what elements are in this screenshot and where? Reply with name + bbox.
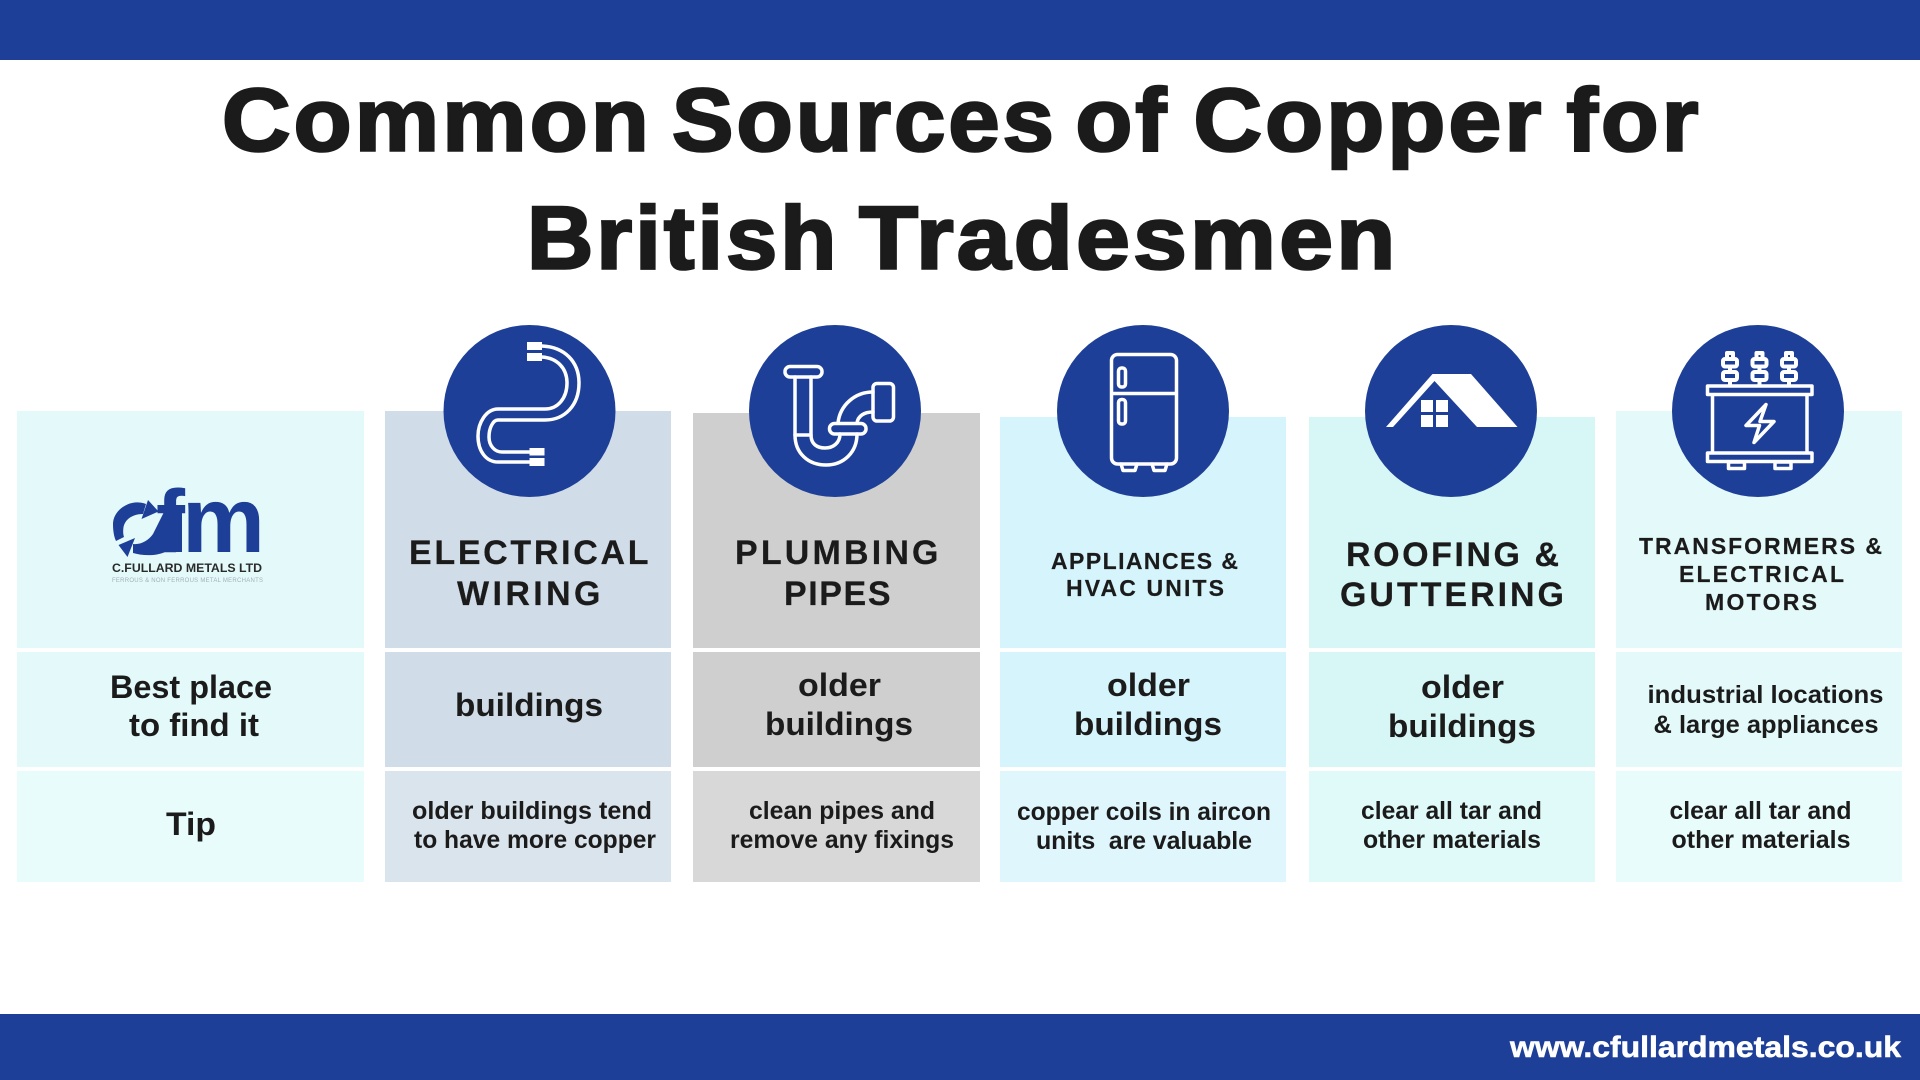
best place text: & large appliances: [1654, 711, 1878, 739]
row label: best place: Best place: [110, 669, 272, 705]
heading: TRANSFORMERS &: [1639, 533, 1882, 559]
heading: [1639, 533, 1882, 615]
tip text: other materials: [1363, 826, 1541, 854]
best place text: [1648, 681, 1884, 739]
logo: C.Fullard Metals: f: [156, 471, 185, 571]
tip text: clear all tar and: [1361, 797, 1542, 825]
best place text: buildings: [1074, 706, 1222, 742]
icon: transformer: [1672, 325, 1844, 497]
best place text: buildings: [765, 706, 913, 742]
tip text: copper coils in aircon: [1017, 798, 1271, 826]
icon: electrical wire: [444, 325, 616, 497]
best place text: older: [1421, 669, 1504, 705]
icon: roof and window: [1365, 325, 1537, 497]
panel: appliances and hvac: [1000, 417, 1286, 882]
heading: GUTTERING: [1340, 576, 1564, 614]
row label: tip: Tip: [166, 806, 216, 842]
tip text: clean pipes and: [749, 797, 935, 825]
best place text: industrial locations: [1648, 681, 1884, 709]
title: of: [1076, 69, 1170, 169]
website url: www.cfullardmetals.co.uk: [1509, 1031, 1901, 1064]
tip text: units are valuable: [1036, 827, 1252, 855]
panel: row labels column: [17, 411, 364, 882]
logo: C.Fullard Metals: m: [182, 468, 265, 572]
heading: ROOFING &: [1346, 536, 1559, 574]
tip text: clear all tar and: [1670, 797, 1852, 825]
heading: [735, 534, 938, 613]
bottom banner: [0, 1014, 1920, 1080]
heading: PIPES: [784, 575, 890, 613]
best place text: buildings: [1388, 708, 1536, 744]
title: Sources: [672, 69, 1057, 169]
panel: roofing and guttering: [1309, 417, 1595, 882]
best place text: [765, 667, 913, 742]
title: Copper: [1194, 69, 1544, 169]
tip text: to have more copper: [414, 826, 656, 854]
tip text: other materials: [1672, 826, 1850, 854]
heading: [1051, 548, 1238, 601]
best place text: older: [1107, 667, 1190, 703]
tip text: [1670, 797, 1852, 854]
tip text: remove any fixings: [730, 826, 954, 854]
icon: refrigerator: [1057, 325, 1229, 497]
best place text: [1074, 667, 1222, 742]
logo: C.Fullard Metals: [112, 468, 265, 584]
best place text: older: [798, 667, 881, 703]
tip text: [412, 797, 656, 854]
logo: C.Fullard Metals: FERROUS & NON FERROUS METAL MERCHANTS: [112, 578, 263, 584]
top banner: [0, 0, 1920, 60]
icon: pipe trap: [749, 325, 921, 497]
heading: ELECTRICAL: [1679, 561, 1844, 587]
heading: PLUMBING: [735, 534, 938, 572]
heading: MOTORS: [1705, 589, 1817, 615]
best place text: buildings: [455, 687, 603, 723]
best place text: [1388, 669, 1536, 744]
heading: WIRING: [457, 575, 600, 613]
title: Tradesmen: [859, 188, 1398, 288]
title: [222, 69, 1702, 288]
heading: [409, 534, 648, 613]
panel: plumbing pipes: [693, 413, 980, 882]
title: Common: [222, 69, 652, 169]
title: British: [527, 188, 840, 288]
heading: [1340, 536, 1564, 614]
heading: APPLIANCES &: [1051, 548, 1238, 574]
title: for: [1566, 69, 1702, 169]
row label: best place: [110, 669, 272, 743]
tip text: [1017, 798, 1271, 855]
panel: electrical wiring: [385, 411, 671, 882]
panel: transformers and electrical motors: [1616, 411, 1902, 882]
logo: C.Fullard Metals: C.FULLARD METALS LTD: [112, 561, 262, 575]
tip text: [1361, 797, 1542, 854]
heading: ELECTRICAL: [409, 534, 648, 572]
tip text: older buildings tend: [412, 797, 652, 825]
tip text: [730, 797, 954, 854]
heading: HVAC UNITS: [1066, 575, 1224, 601]
row label: best place: to find it: [129, 707, 259, 743]
